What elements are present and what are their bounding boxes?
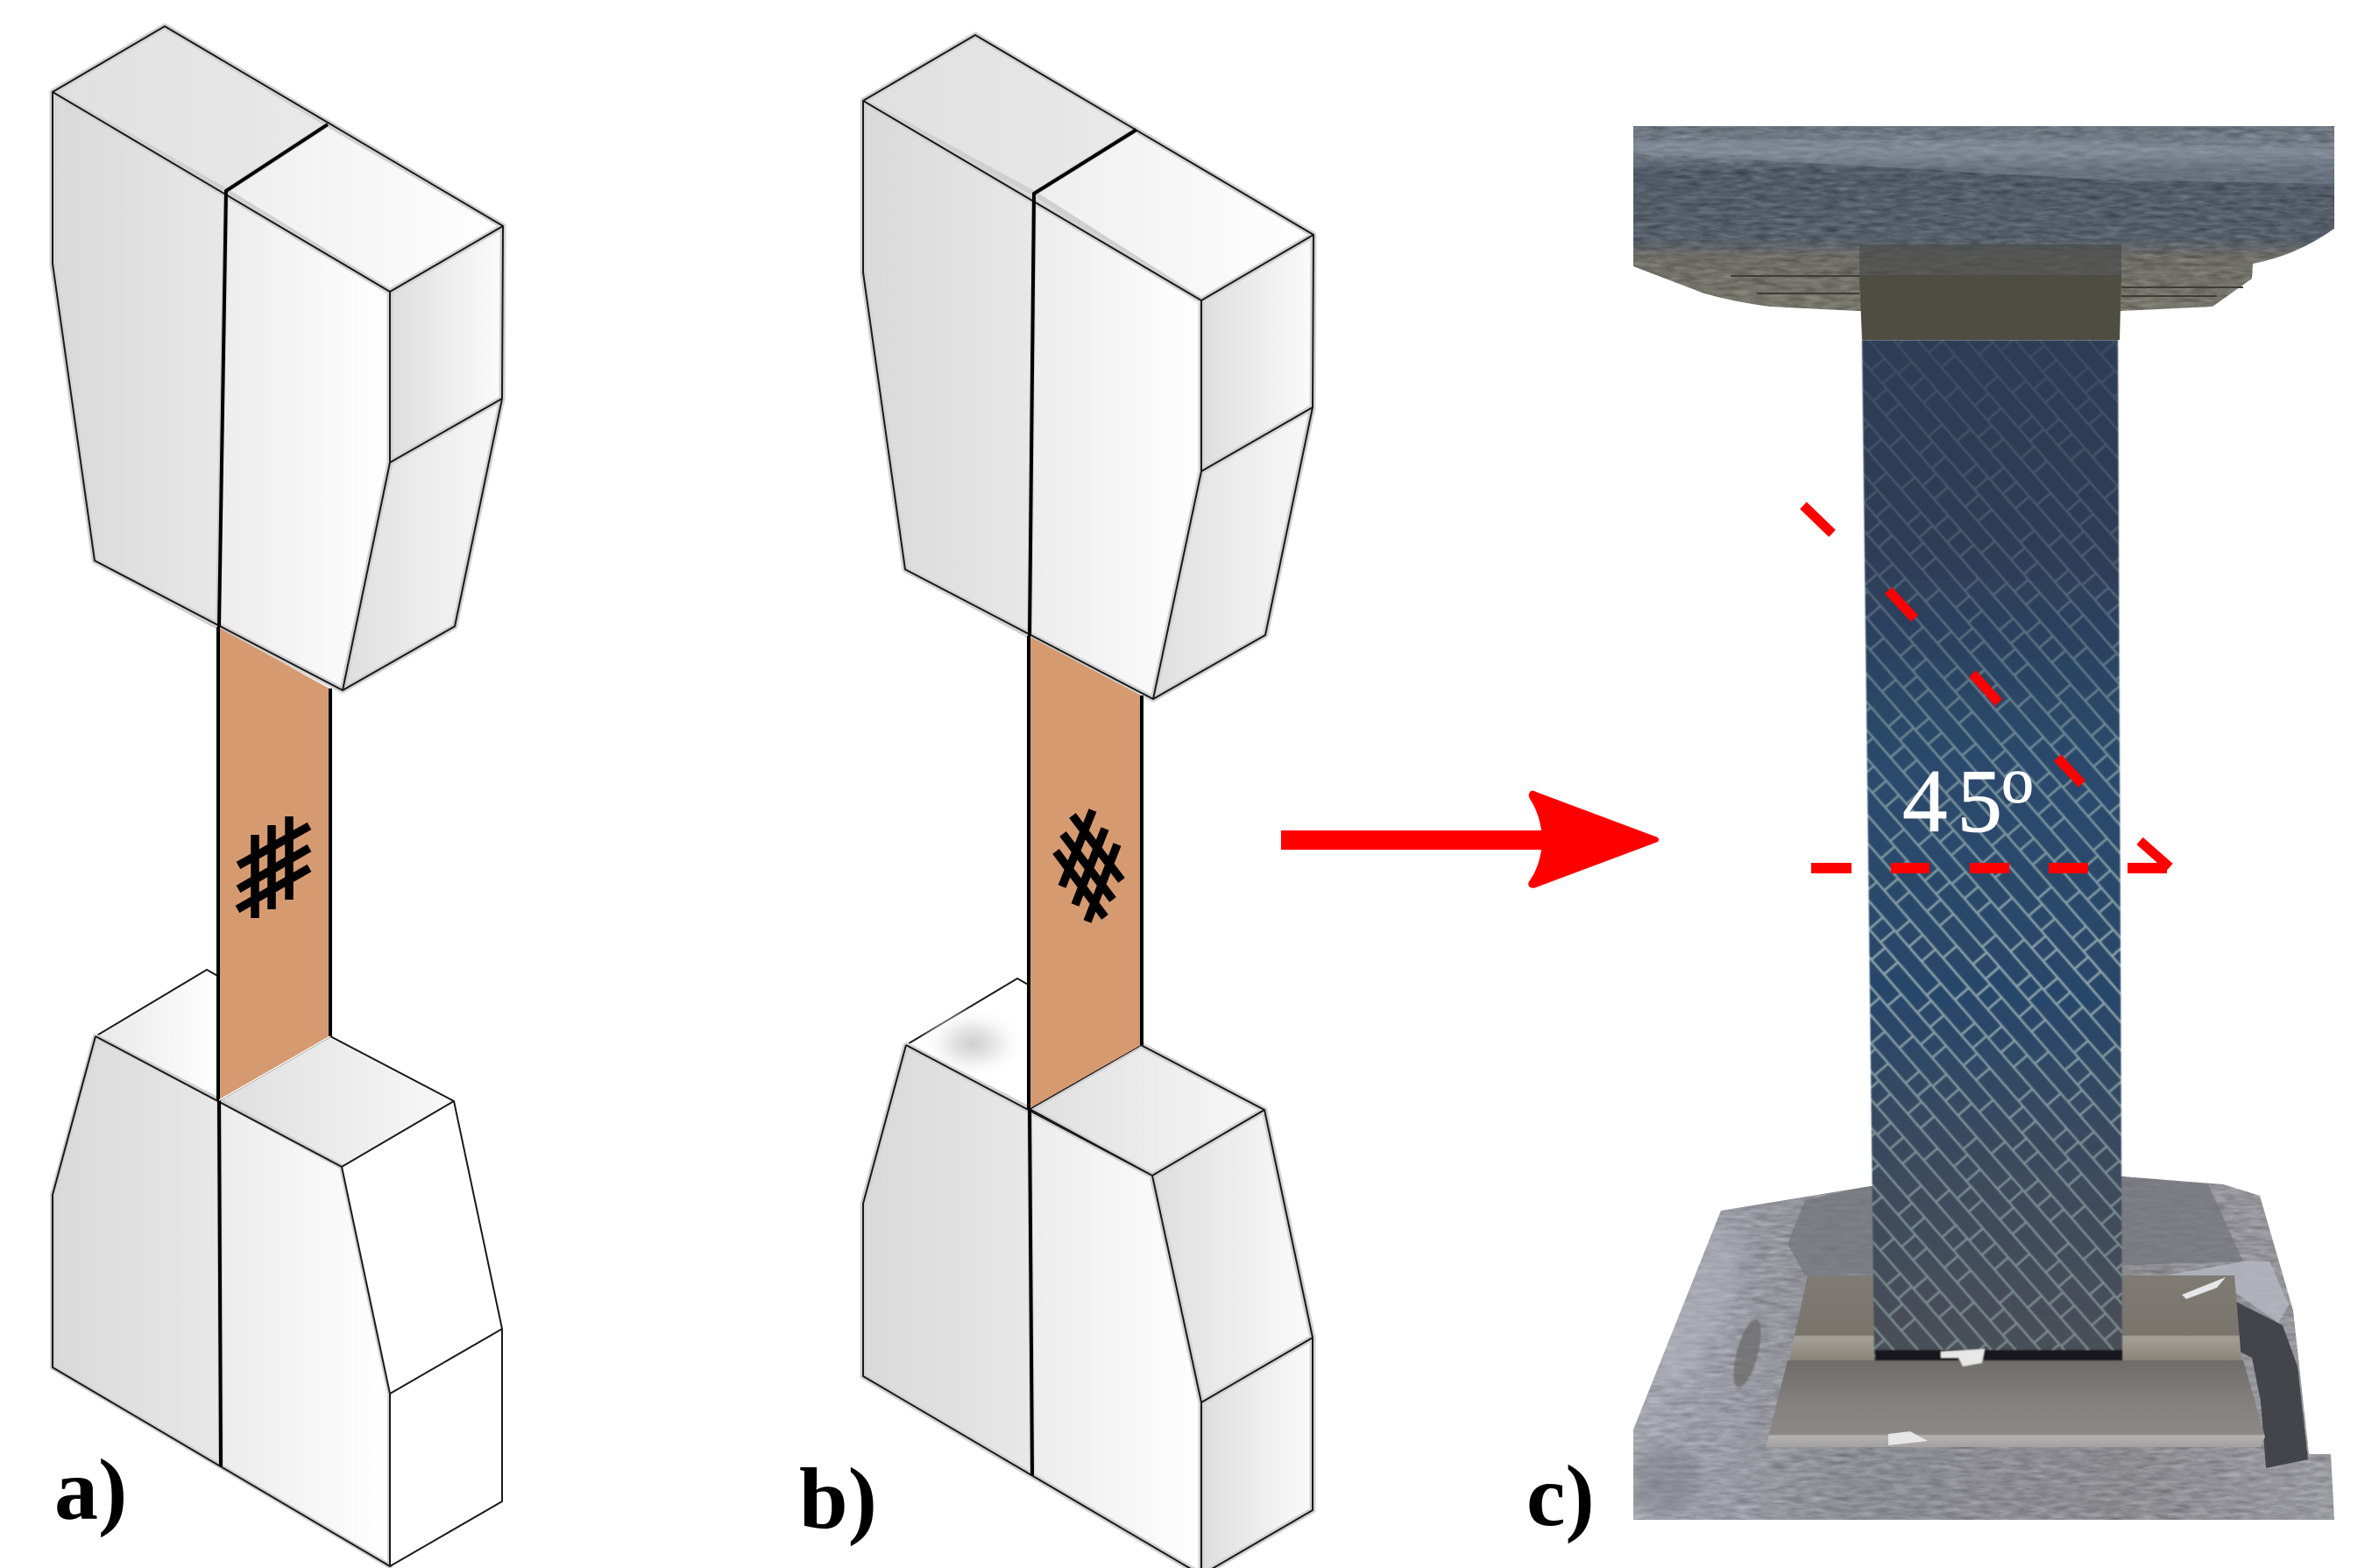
panel b lower grip [863,978,1313,1568]
panel a lower grip [53,970,502,1566]
photo: specimen end tab [1859,275,2121,340]
45 degree annotation text: o [2001,745,2034,817]
red dashed diagonal 45 degree line [1803,505,2170,867]
label: a): a) [54,1441,127,1538]
panel b orange gauge section [1029,636,1142,1109]
label: c): c) [1526,1447,1595,1544]
panel c: photo of specimen clamped in test machine [1630,126,2334,1520]
photo: lower clamp base [1630,1176,2334,1520]
panel a upper grip [53,26,503,690]
label: b): b) [799,1450,877,1547]
icon: 0/90 fibre hatch [237,816,309,918]
red dashed horizontal reference line [1811,863,2167,873]
photo: carbon fibre specimen [1862,340,2122,1367]
panel a orange gauge section [218,627,330,1100]
45 degree annotation text: 45 [1902,752,2012,851]
icon: 45 degree fibre hatch [1056,810,1122,922]
panel a: specimen in grips, 0/90 fibre orientation [53,26,503,1566]
photo: upper grip block [1633,126,2334,311]
panel b upper grip [863,35,1313,699]
panel b: specimen in grips, 45 degree fibre orientation [863,35,1313,1568]
arrow: red arrow pointing to photo [1281,791,1659,888]
